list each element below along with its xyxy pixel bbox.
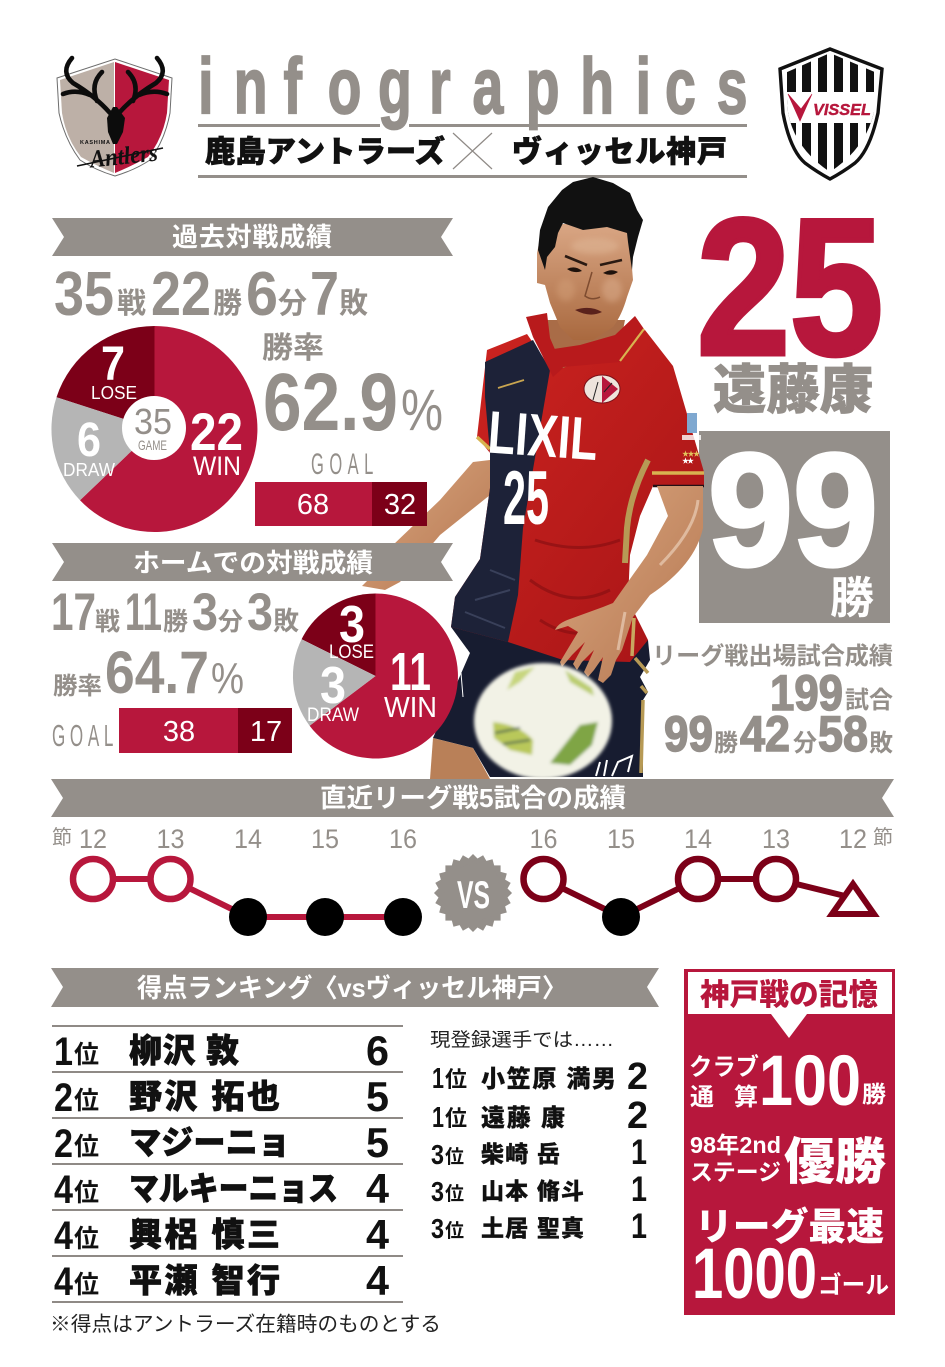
player name: 遠藤康 — [713, 361, 873, 420]
stat: fastest 1000 league goals: ゴール — [818, 1271, 889, 1299]
row: 4th: 位 — [74, 1225, 99, 1253]
player: leg — [430, 738, 490, 779]
row: 4th: 4 — [54, 1260, 74, 1304]
row: Yamamoto — [431, 1170, 647, 1209]
stat: home win rate: % — [211, 654, 244, 703]
form: Vissel last five: 節 — [873, 826, 893, 849]
row: 2nd: マジーニョ — [129, 1124, 290, 1161]
row: 1st: 1 — [54, 1030, 73, 1074]
row: 4th: 4 — [366, 1211, 390, 1258]
text: league career record: 試合 — [845, 687, 893, 714]
row: 4th: 位 — [74, 1179, 99, 1207]
row: Shibasaki — [431, 1133, 647, 1172]
logo: Vissel Kobe crest — [780, 49, 882, 180]
stat: home win rate — [53, 639, 244, 706]
badge: VS — [434, 854, 512, 932]
player: hair — [538, 177, 643, 270]
form: Vissel last five: 15 — [607, 824, 635, 854]
pie chart: overall results: 6 — [77, 414, 101, 467]
player: right arm and hand — [555, 486, 703, 683]
stat: home win rate: 勝率 — [53, 673, 102, 700]
heading: match-up — [205, 133, 727, 169]
row: Shibasaki: 3 — [431, 1139, 444, 1170]
heading: match-up: 鹿島アントラーズ — [205, 135, 445, 169]
row: 4th: 位 — [74, 1271, 99, 1299]
row: 2nd: 2 — [54, 1076, 73, 1120]
stats line: home record — [51, 583, 299, 642]
row: Endo: 位 — [445, 1106, 467, 1131]
text: league career record: 分 — [793, 730, 817, 757]
player: collar — [526, 313, 644, 377]
pie chart: home results: DRAW — [307, 705, 359, 726]
row: 1st: 位 — [74, 1041, 99, 1069]
row: 4th: 4 — [366, 1257, 390, 1304]
row: Endo: 2 — [627, 1095, 648, 1137]
pie chart: overall results — [51, 326, 257, 532]
text: league career record: 99 — [664, 706, 713, 762]
stat: club 100 wins: 通 — [690, 1084, 714, 1111]
stats line: home record: 敗 — [273, 606, 299, 636]
player: jersey folds — [465, 570, 515, 628]
row: 2nd: 位 — [74, 1133, 99, 1161]
panel: 99 wins: 99 — [708, 420, 878, 599]
player: jersey — [451, 330, 704, 662]
bar: goals overall — [255, 448, 427, 526]
stat: 1998 2nd stage champion: 優勝 — [784, 1134, 886, 1190]
row: Shibasaki: 柴崎 岳 — [481, 1141, 560, 1167]
bar: goals overall: 68 — [297, 489, 329, 521]
row: Doi: 位 — [445, 1220, 464, 1242]
stats line: overall record: 敗 — [339, 287, 368, 320]
stats line: home record: 勝 — [163, 608, 188, 636]
pie chart: overall results: 35 — [134, 401, 172, 442]
row: Endo: 遠藤 康 — [481, 1105, 565, 1132]
row: 1st — [54, 1027, 389, 1074]
heading: match-up: ヴィッセル神戸 — [512, 135, 727, 169]
text: league career record: 199 — [770, 665, 843, 721]
pie chart: home results: LOSE — [329, 642, 374, 663]
row: Shibasaki: 1 — [631, 1133, 647, 1172]
row: 2nd: 2 — [54, 1122, 73, 1166]
bar: goals at home: 17 — [250, 716, 282, 748]
player: side stripe — [625, 460, 648, 563]
row: Yamamoto: 位 — [445, 1183, 464, 1205]
row: 4th: 4 — [366, 1165, 390, 1212]
row: 2nd — [54, 1073, 389, 1120]
player number: 25 — [697, 179, 883, 396]
pie chart: home results — [293, 593, 458, 758]
pie chart: overall results: 22 — [190, 403, 243, 462]
form: Vissel last five: 16 — [530, 824, 558, 854]
stats line: overall record: 35 — [54, 260, 114, 329]
player: ball — [474, 663, 612, 779]
pie chart: overall results: LOSE — [91, 383, 137, 403]
row: 4th — [54, 1165, 390, 1212]
player: sleeve badge: ★★ — [682, 457, 694, 465]
stats line: overall record: 戦 — [117, 287, 146, 320]
banner: head to head — [52, 218, 453, 256]
banner: home record: ホームでの対戦成績 — [133, 548, 373, 578]
badge: VS: VS — [457, 874, 490, 917]
row: 2nd: 5 — [366, 1119, 389, 1166]
text: league career record: 勝 — [714, 730, 738, 757]
stats line: home record: 3 — [192, 583, 218, 642]
bar: goals at home: 38 — [163, 716, 195, 748]
row: 4th: マルキーニョス — [129, 1170, 338, 1207]
title: infographics — [198, 42, 748, 178]
panel: memories of Kobe matches — [684, 969, 895, 1315]
form: Kashima last five: 12 — [79, 824, 107, 854]
callout: panel heading — [688, 972, 892, 1038]
row: 2nd: 5 — [366, 1073, 389, 1120]
footnote: ※得点はアントラーズ在籍時のものとする — [50, 1313, 441, 1336]
row: 2nd: 野沢 拓也 — [129, 1078, 280, 1115]
stats line: home record: 戦 — [95, 608, 120, 636]
stats line: home record: 11 — [125, 583, 162, 642]
row: 4th: 興梠 慎三 — [129, 1216, 280, 1253]
row: Doi — [431, 1207, 647, 1246]
row: 4th — [54, 1257, 390, 1304]
player: shirt number: 25 — [503, 456, 549, 541]
stat: 1998 2nd stage champion: 98年2nd — [690, 1132, 781, 1158]
player: jersey trim near hand — [632, 618, 634, 656]
form: Vissel last five: 13 — [762, 824, 790, 854]
form: Kashima last five: 節 — [52, 826, 72, 849]
row: Ogasawara — [432, 1056, 648, 1098]
stat: home win rate: 64.7 — [105, 639, 209, 706]
player photo: Endo Yasushi — [362, 177, 704, 779]
bar: goals at home — [52, 708, 292, 753]
player: shorts gold trim — [635, 658, 648, 773]
banner: head to head: 過去対戦成績 — [172, 222, 332, 252]
row: Ogasawara: 小笠原 満男 — [481, 1065, 616, 1093]
panel: 99 wins: 勝 — [830, 574, 874, 623]
row: Ogasawara: 2 — [627, 1056, 648, 1098]
stat: club 100 wins — [689, 1042, 886, 1121]
row: Doi: 3 — [431, 1213, 444, 1244]
stats line: home record: 3 — [247, 583, 273, 642]
banner: last five league matches: 直近リーグ戦5試合の成績 — [320, 783, 626, 813]
form: Kashima last five: 15 — [311, 824, 339, 854]
pie chart: overall results: 7 — [101, 338, 125, 391]
form: Vissel last five: 12 — [839, 824, 867, 854]
stats line: overall record — [54, 260, 368, 329]
stat: 1998 2nd stage champion: ステージ — [690, 1159, 781, 1185]
stat: club 100 wins: クラブ — [689, 1053, 759, 1081]
stat: win rate — [262, 332, 443, 448]
stats line: overall record: 22 — [151, 260, 211, 329]
player: shorts marks — [596, 756, 632, 776]
stat: club 100 wins: 算 — [734, 1084, 758, 1111]
row: Ogasawara: 1 — [432, 1063, 444, 1095]
player: crest on jersey — [584, 375, 620, 403]
stat: win rate: 勝率 — [262, 332, 324, 365]
row: 4th — [54, 1211, 390, 1258]
row: 2nd: 位 — [74, 1087, 99, 1115]
text: league career record: 敗 — [869, 730, 893, 757]
player: arm highlight — [618, 500, 698, 650]
table: current squad scorers — [430, 1029, 648, 1246]
row: Ogasawara: 位 — [445, 1067, 467, 1092]
row: 1st: 柳沢 敦 — [129, 1032, 239, 1069]
logo: Kashima Antlers crest: KASHIMA — [80, 140, 110, 146]
row: 1st: 6 — [366, 1027, 389, 1074]
pie chart: home results: 3 — [339, 596, 365, 654]
stat: win rate: % — [401, 378, 443, 443]
stat: club 100 wins: 勝 — [862, 1081, 886, 1107]
text: league career record: リーグ戦出場試合成績 — [652, 642, 893, 670]
stat: fastest 1000 league goals — [692, 1206, 889, 1314]
player: sponsor: LIXIL — [486, 398, 600, 473]
callout: panel heading: 神戸戦の記憶 — [700, 978, 878, 1012]
row: Yamamoto: 山本 脩斗 — [481, 1178, 584, 1204]
stats line: overall record: 勝 — [213, 287, 242, 320]
bar: goals overall: GOAL — [311, 448, 379, 481]
player: sleeve badge: ★★★ — [682, 450, 700, 458]
player: jersey navy panel — [451, 340, 550, 642]
banner: last five league matches — [51, 779, 894, 817]
row: 4th: 4 — [54, 1168, 74, 1212]
banner: scoring ranking — [51, 968, 659, 1007]
banner: home record — [52, 543, 453, 581]
text: league career record — [652, 642, 893, 762]
pie chart: overall results: WIN — [193, 451, 241, 481]
text: league career record: 42 — [740, 706, 790, 762]
stats line: home record: 17 — [51, 583, 96, 642]
form: Kashima last five — [52, 824, 422, 936]
form: Kashima last five: 13 — [156, 824, 184, 854]
stat: club 100 wins: 100 — [759, 1042, 861, 1121]
banner: scoring ranking: 得点ランキング〈vsヴィッセル神戸〉 — [137, 973, 567, 1003]
stats line: overall record: 7 — [310, 260, 339, 329]
row: 4th: 4 — [54, 1214, 74, 1258]
table: all-time scorers — [52, 1025, 403, 1304]
row: 2nd — [54, 1119, 389, 1166]
row: Yamamoto: 3 — [431, 1176, 444, 1207]
player: neck — [547, 320, 625, 372]
row: Endo: 1 — [432, 1102, 444, 1134]
text: league career record: 58 — [818, 706, 868, 762]
row: Yamamoto: 1 — [631, 1170, 647, 1209]
form: Vissel last five: 14 — [684, 824, 712, 854]
row: Doi: 土居 聖真 — [481, 1215, 584, 1241]
stat: fastest 1000 league goals: リーグ最速 — [695, 1206, 884, 1249]
stat: 1998 2nd stage champion — [690, 1132, 886, 1190]
player: shorts — [433, 627, 650, 777]
logo: Vissel Kobe crest: VISSEL — [813, 102, 871, 119]
pie chart: home results: 3 — [320, 657, 346, 715]
player: sleeve badge — [682, 413, 701, 465]
form: Kashima last five: 16 — [389, 824, 417, 854]
player: face — [537, 224, 633, 340]
row: Endo — [432, 1095, 648, 1137]
form: Vissel last five — [524, 824, 893, 936]
row: 4th: 平瀬 智行 — [129, 1262, 280, 1299]
stats line: home record: 分 — [218, 608, 243, 636]
player: left arm — [362, 460, 490, 590]
form: Kashima last five: 14 — [234, 824, 262, 854]
stat: win rate: 62.9 — [263, 357, 398, 448]
bar: goals at home: GOAL — [52, 719, 118, 753]
row: Shibasaki: 位 — [445, 1146, 464, 1168]
row: Doi: 1 — [631, 1207, 647, 1246]
pie chart: overall results: GAME — [138, 437, 167, 453]
pie chart: home results: WIN — [384, 692, 437, 724]
logo: Kashima Antlers crest — [57, 58, 172, 176]
stat: fastest 1000 league goals: 1000 — [692, 1235, 817, 1314]
logo: Kashima Antlers crest: Antlers — [87, 140, 159, 174]
stats line: overall record: 分 — [278, 287, 307, 320]
pie chart: home results: 11 — [390, 642, 431, 702]
table: current squad scorers: 現登録選手では…… — [430, 1029, 614, 1051]
bar: goals overall: 32 — [384, 489, 416, 521]
title: infographics: infographics — [198, 42, 748, 130]
stats line: overall record: 6 — [246, 260, 278, 329]
pie chart: overall results: DRAW — [63, 460, 115, 480]
